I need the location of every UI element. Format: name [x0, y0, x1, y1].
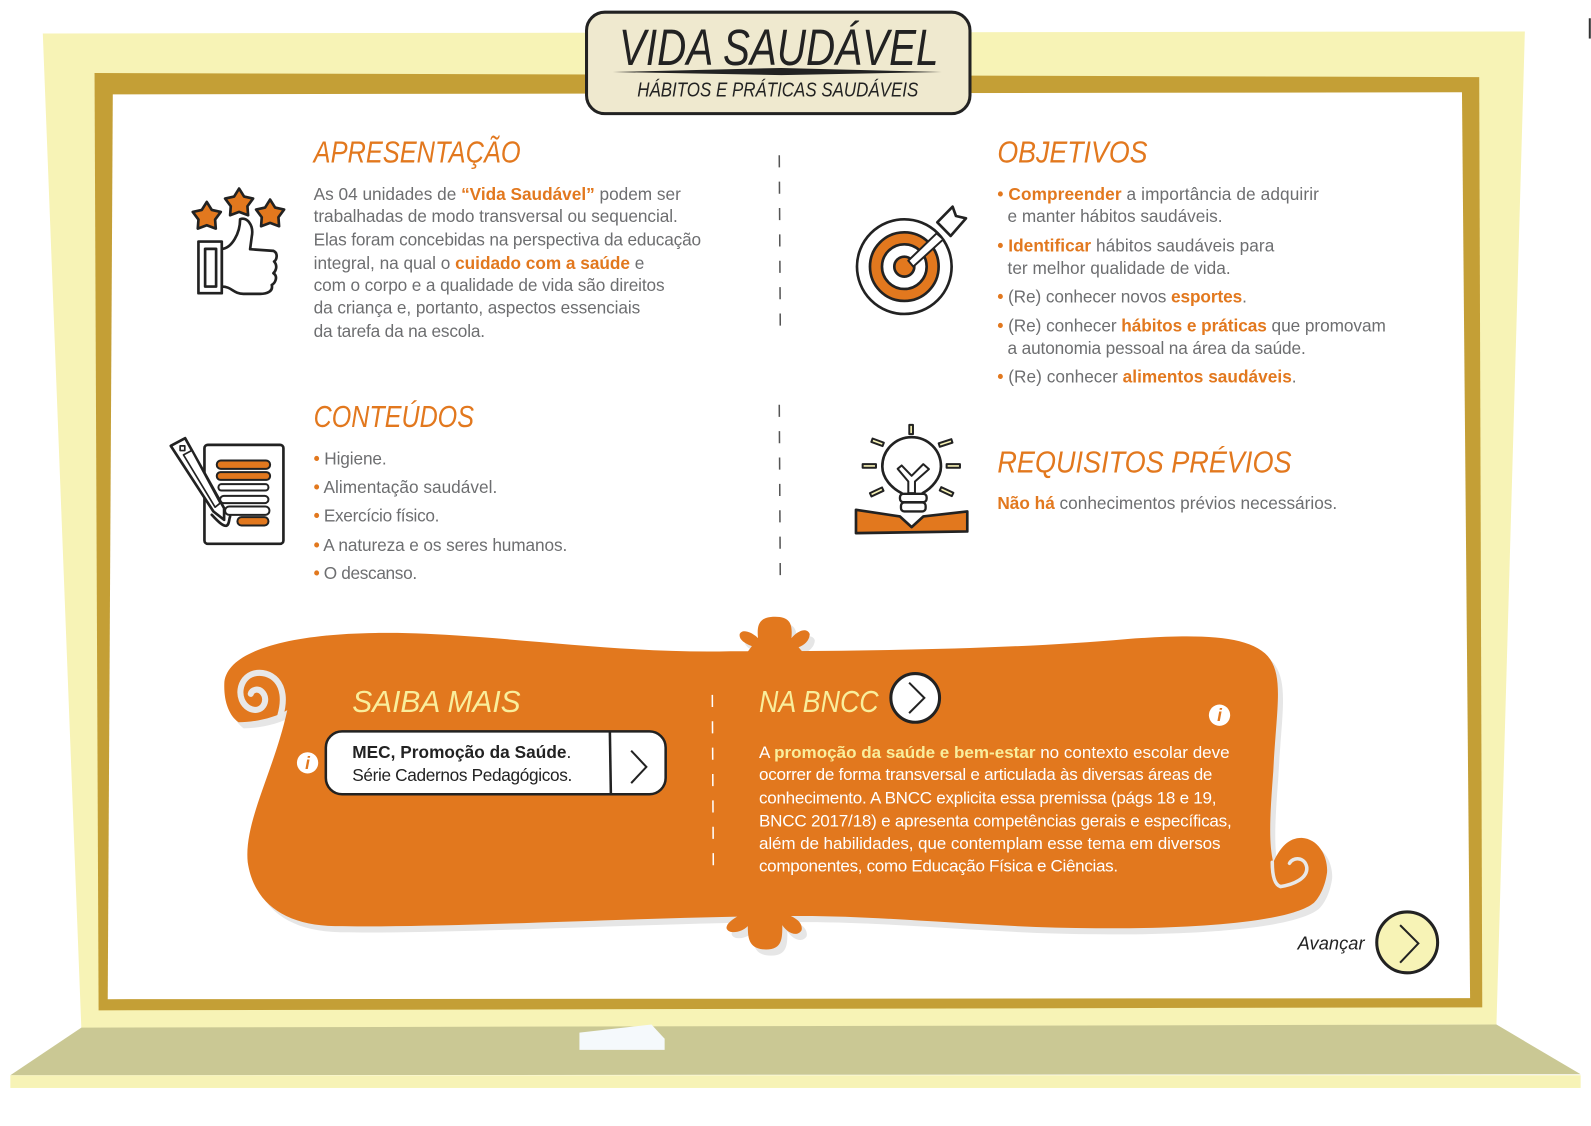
list: objetivos: • Compreender a importância de adquirir [997, 184, 1319, 204]
panel: na bncc [759, 674, 1232, 875]
right scroll curl [1272, 859, 1307, 887]
panel: objetivos [997, 135, 1386, 386]
heading: objetivos: OBJETIVOS [997, 135, 1148, 169]
button: na bncc arrow [891, 674, 940, 722]
text block: apresentação: com o corpo e a qualidade de vida são direitos [314, 275, 665, 295]
scroll shadow [229, 623, 1332, 956]
text block: na bncc: BNCC 2017/18) e apresenta competências gerais e específicas, [759, 812, 1232, 831]
text block: apresentação: integral, na qual o cuidado com a saúde e [314, 253, 644, 273]
text block: apresentação: Elas foram concebidas na perspectiva da educação [314, 229, 701, 249]
text block: na bncc [759, 743, 1232, 875]
vertical dashed divider [779, 155, 780, 579]
text block: apresentação: da tarefa da na escola. [314, 321, 485, 341]
panel: apresentação [312, 134, 701, 341]
text block: na bncc: componentes, como Educação Física e Ciências. [759, 856, 1118, 875]
panel: conteúdos [314, 399, 567, 583]
text block: apresentação: da criança e, portanto, aspectos essenciais [314, 297, 640, 317]
shelf with eraser [10, 1025, 1581, 1088]
list: conteúdos: • Alimentação saudável. [314, 477, 497, 497]
title plaque [587, 12, 970, 114]
text block: apresentação [314, 184, 701, 341]
next button: avançar [1297, 912, 1438, 973]
title plaque: VIDA SAUDÁVEL [619, 19, 939, 76]
title plaque: HÁBITOS E PRÁTICAS SAUDÁVEIS [637, 78, 919, 101]
heading: apresentação: APRESENTAÇÃO [312, 134, 521, 169]
list: conteúdos: • O descanso. [314, 563, 417, 583]
text block: na bncc: ocorrer de forma transversal e articulada às diversas áreas de [759, 765, 1212, 784]
orange scroll banner [224, 617, 1332, 956]
panel: saiba mais [297, 685, 666, 794]
list: objetivos: a autonomia pessoal na área da saúde. [1008, 338, 1306, 358]
next button: avançar: Avançar [1297, 932, 1366, 953]
heading: saiba mais: SAIBA MAIS [352, 685, 521, 719]
list: objetivos [997, 184, 1386, 386]
list: objetivos: • (Re) conhecer hábitos e práticas que promovam [997, 316, 1386, 336]
list: objetivos: ter melhor qualidade de vida. [1008, 258, 1231, 278]
text block: na bncc: além de habilidades, que contemplam esse tema em diversos [759, 834, 1221, 853]
link button: MEC, Promoção da Saúde. [352, 742, 571, 762]
heading: conteúdos: CONTEÚDOS [314, 399, 474, 434]
icon: info [297, 752, 318, 773]
list: objetivos: e manter hábitos saudáveis. [1008, 206, 1223, 226]
icon: target and arrow [857, 207, 966, 314]
heading: requisitos prévios: REQUISITOS PRÉVIOS [997, 445, 1292, 480]
icon: thumbs up with stars [193, 189, 284, 294]
left scroll curl [240, 673, 283, 716]
list: conteúdos: • Exercício físico. [314, 505, 439, 525]
list: conteúdos: • Higiene. [314, 449, 387, 469]
heading: na bncc: NA BNCC [759, 685, 880, 719]
text block: apresentação: trabalhadas de modo transversal ou sequencial. [314, 206, 678, 226]
text block: na bncc: conhecimento. A BNCC explicita essa premissa (págs 18 e 19, [759, 788, 1216, 807]
corner mark [1589, 18, 1591, 39]
list: objetivos: • (Re) conhecer novos esportes. [997, 286, 1247, 306]
text block: na bncc: A promoção da saúde e bem-estar no contexto escolar deve [759, 743, 1230, 762]
link button [326, 731, 666, 794]
list: objetivos: • (Re) conhecer alimentos saudáveis. [997, 366, 1297, 386]
icon: light bulb over book [856, 425, 967, 533]
text block: apresentação: As 04 unidades de “Vida Saudável” podem ser [314, 184, 681, 204]
icon: info: i [305, 753, 311, 773]
list: conteúdos [314, 449, 567, 583]
icon: info [1209, 705, 1230, 726]
text block: requisitos prévios: Não há conhecimentos prévios necessários. [997, 493, 1337, 513]
link button: Série Cadernos Pedagógicos. [352, 765, 572, 785]
list: objetivos: • Identificar hábitos saudáveis para [997, 236, 1275, 256]
scroll body [224, 617, 1327, 949]
list: conteúdos: • A natureza e os seres humanos. [314, 535, 567, 555]
banner dashed divider [712, 695, 713, 869]
icon: document and pencil [171, 438, 283, 544]
icon: info: i [1217, 705, 1223, 725]
panel: requisitos prévios [997, 445, 1337, 513]
